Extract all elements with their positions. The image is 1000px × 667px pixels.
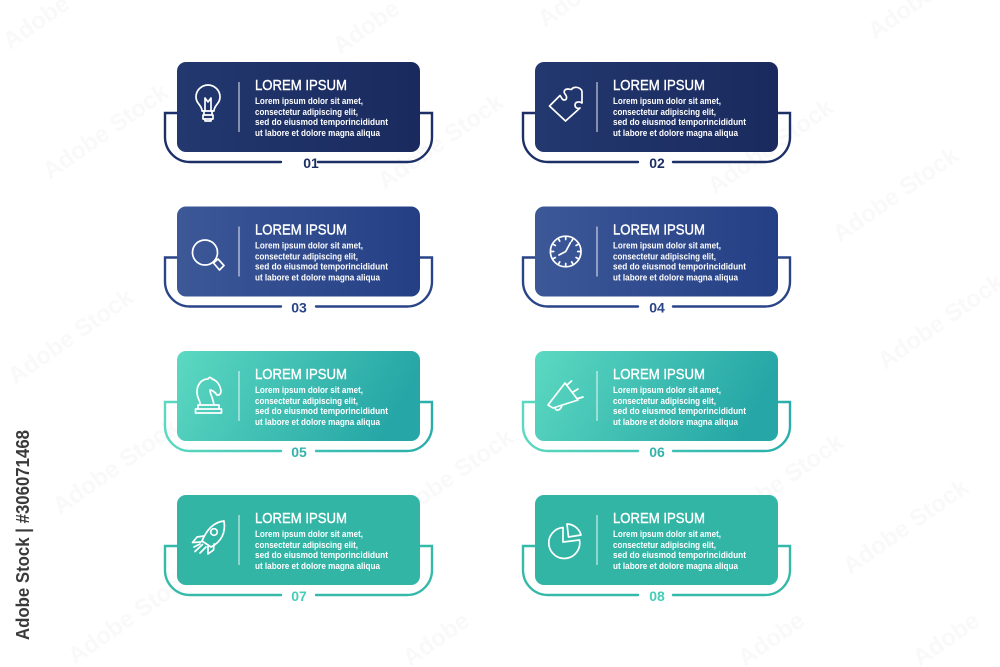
text block 05: ut labore et dolore magna aliqua [255, 417, 381, 428]
text block 08: sed do eiusmod temporincididunt [613, 550, 747, 561]
text block 04 [613, 240, 747, 284]
text block 07 [255, 529, 389, 572]
icon: puzzle piece [550, 87, 582, 121]
heading 07: LOREM IPSUM [255, 511, 347, 527]
watermark: Adobe Stock [828, 141, 964, 248]
panel: step 03 [165, 206, 432, 316]
panel: step 01 [165, 62, 432, 171]
text block 02: Lorem ipsum dolor sit amet, [613, 96, 721, 107]
heading 01: LOREM IPSUM [255, 78, 347, 94]
bracket 05 [165, 402, 432, 451]
card 05 [177, 351, 420, 441]
text block 04: ut labore et dolore magna aliqua [613, 272, 739, 284]
heading 02: LOREM IPSUM [613, 78, 705, 94]
heading 08: LOREM IPSUM [613, 511, 705, 527]
heading 04: LOREM IPSUM [613, 222, 705, 238]
card 07 [177, 495, 420, 585]
bracket 08 [523, 546, 790, 595]
number 05: 05 [291, 444, 307, 460]
stock id vertical text: Adobe Stock | #306071468 [13, 430, 33, 640]
text block 05: Lorem ipsum dolor sit amet, [255, 385, 363, 396]
card 01 [177, 62, 420, 152]
text block 08: ut labore et dolore magna aliqua [613, 561, 739, 572]
panel: step 04 [523, 206, 790, 316]
panel: step 07 [165, 495, 432, 604]
heading 05: LOREM IPSUM [255, 367, 347, 383]
watermark: Adobe Stock [373, 88, 509, 195]
text block 06: consectetur adipiscing elit, [613, 396, 716, 407]
text block 02 [613, 96, 747, 139]
text block 01: ut labore et dolore magna aliqua [255, 128, 381, 139]
panel: step 08 [523, 495, 790, 604]
text block 08: Lorem ipsum dolor sit amet, [613, 529, 721, 540]
heading 06: LOREM IPSUM [613, 367, 705, 383]
text block 03: sed do eiusmod temporincididunt [255, 262, 389, 272]
bracket 04 [523, 258, 790, 306]
text block 07: ut labore et dolore magna aliqua [255, 561, 381, 572]
text block 07: Lorem ipsum dolor sit amet, [255, 529, 363, 540]
bracket 03 [165, 258, 432, 306]
text block 08 [613, 529, 747, 572]
text block 04: sed do eiusmod temporincididunt [613, 262, 747, 272]
watermark: Adobe Stock [838, 473, 974, 580]
bracket 06 [523, 402, 790, 451]
heading 03: LOREM IPSUM [255, 222, 347, 238]
text block 01: sed do eiusmod temporincididunt [255, 117, 389, 128]
text block 01: consectetur adipiscing elit, [255, 107, 358, 118]
card 08 [535, 495, 778, 585]
text block 08: consectetur adipiscing elit, [613, 540, 716, 551]
bracket 02 [523, 113, 790, 162]
number 01: 01 [303, 155, 319, 171]
panel: step 06 [523, 351, 790, 460]
number 06: 06 [649, 444, 665, 460]
text block 03: Lorem ipsum dolor sit amet, [255, 240, 363, 252]
text block 01: Lorem ipsum dolor sit amet, [255, 96, 363, 107]
text block 03: consectetur adipiscing elit, [255, 252, 358, 262]
text block 05: consectetur adipiscing elit, [255, 396, 358, 407]
text block 01 [255, 96, 389, 139]
card 04 [535, 206, 778, 296]
text block 02: ut labore et dolore magna aliqua [613, 128, 739, 139]
number 04: 04 [649, 300, 665, 316]
text block 05: sed do eiusmod temporincididunt [255, 406, 389, 417]
text block 02: sed do eiusmod temporincididunt [613, 117, 747, 128]
watermark: Adobe Stock [713, 428, 849, 535]
icon: light bulb [196, 85, 220, 121]
card 02 [535, 62, 778, 152]
icon: megaphone [548, 381, 583, 410]
watermark: Adobe Stock [703, 93, 839, 200]
bracket 01 [165, 113, 432, 162]
panel: step 05 [165, 351, 432, 460]
icon: clock [550, 236, 581, 267]
text block 06 [613, 385, 747, 428]
bracket 07 [165, 546, 432, 595]
icon: magnifier [192, 240, 224, 270]
watermark: Adobe Stock [38, 78, 174, 185]
watermark: Adobe Stock [383, 423, 519, 530]
text block 02: consectetur adipiscing elit, [613, 107, 716, 118]
number 07: 07 [291, 588, 307, 604]
panel: step 02 [523, 62, 790, 171]
number 02: 02 [649, 155, 665, 171]
card 06 [535, 351, 778, 441]
icon: pie chart [549, 524, 581, 558]
number 08: 08 [649, 588, 665, 604]
icon: rocket [192, 521, 224, 554]
text block 03 [255, 240, 389, 284]
text block 06: ut labore et dolore magna aliqua [613, 417, 739, 428]
text block 06: Lorem ipsum dolor sit amet, [613, 385, 721, 396]
watermark: Adobe Stock [3, 283, 139, 390]
text block 04: consectetur adipiscing elit, [613, 252, 716, 262]
text block 06: sed do eiusmod temporincididunt [613, 406, 747, 417]
text block 04: Lorem ipsum dolor sit amet, [613, 240, 721, 252]
text block 05 [255, 385, 389, 428]
card 03 [177, 206, 420, 296]
watermark: Adobe Stock [48, 413, 184, 520]
text block 07: sed do eiusmod temporincididunt [255, 550, 389, 561]
watermark: Adobe Stock [63, 563, 199, 667]
text block 03: ut labore et dolore magna aliqua [255, 272, 381, 284]
text block 07: consectetur adipiscing elit, [255, 540, 358, 551]
icon: chess knight [196, 378, 222, 413]
number 03: 03 [291, 300, 307, 316]
